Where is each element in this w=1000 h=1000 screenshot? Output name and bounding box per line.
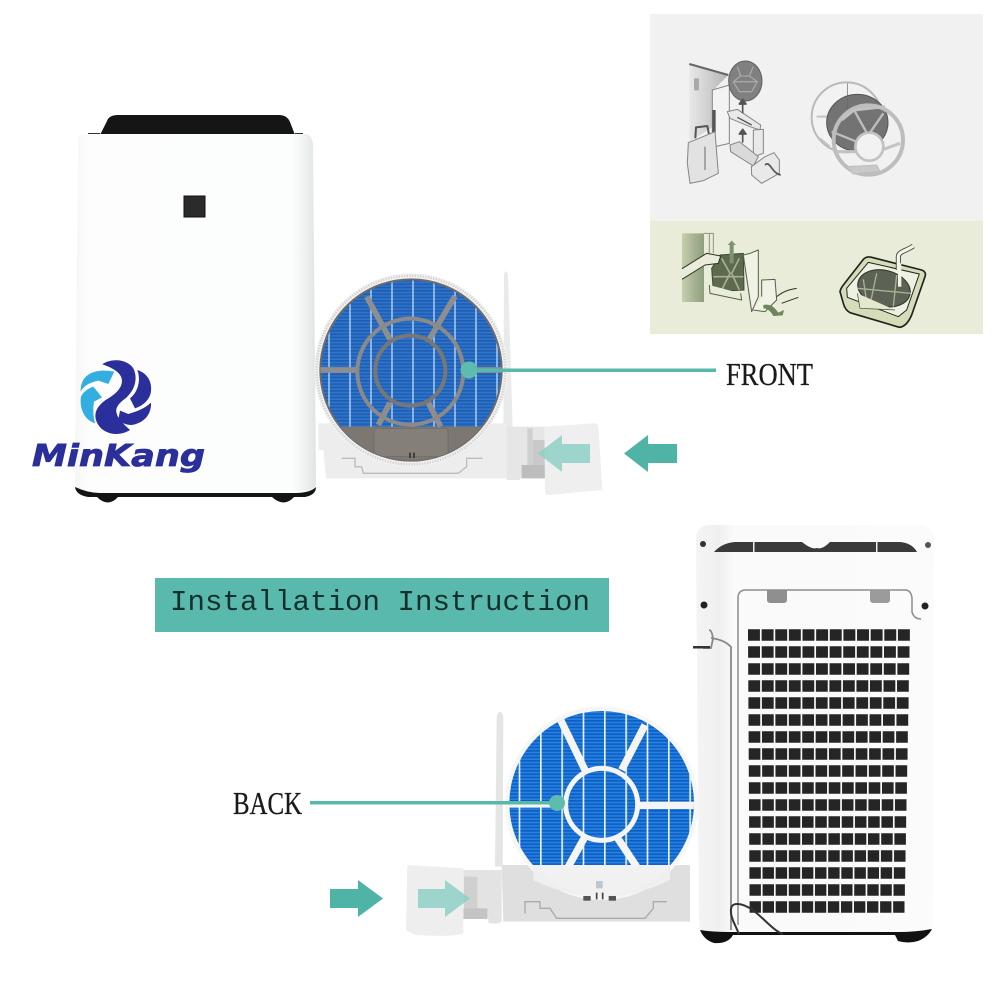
logo wordmark: MinKang [32,439,205,474]
solid arrow: back [330,880,383,917]
brand badge [184,196,205,217]
connector arm [463,870,502,924]
tower post [503,271,513,427]
label: FRONT: FRONT [726,356,813,392]
illustration: soaking filter in water [840,246,925,327]
unit body [696,525,934,934]
front view purifier unit [75,115,316,502]
blue filter media [320,279,502,461]
filter rim [505,707,698,900]
connector arm [507,427,545,480]
rear view purifier unit [693,525,934,943]
filter base [502,865,690,922]
unit body [75,134,316,491]
logo mark [81,360,151,434]
illustration: pulling filter out [682,233,798,316]
bottom edge and feet [700,929,932,943]
rear panel outline [738,590,921,925]
front filter assembly [314,271,602,495]
logo: MinKang [32,360,205,474]
back filter assembly [406,707,698,936]
blue filter media [509,711,694,865]
callout line: back [310,795,565,811]
power cord [731,904,783,934]
water tray clip [544,423,602,495]
panel: care illustrations [650,14,983,334]
top vent strip [714,542,917,552]
base and feet [75,487,316,502]
grey frame [317,296,507,467]
black lid [100,115,295,135]
tower post [495,712,503,867]
solid arrow: front [624,435,677,472]
label: BACK: BACK [233,785,302,821]
filter base [318,423,507,478]
air intake grid [748,635,910,907]
translucent arrow: front [538,435,590,472]
filter rim [314,273,508,467]
illustration: removing filter from unit [687,61,781,183]
panel background: grey [650,14,983,221]
top screws [700,541,706,547]
water tray clip [406,865,463,936]
panel tabs [767,590,787,603]
rear label marks [583,881,616,901]
translucent arrow: back [418,880,470,917]
panel background: green [650,221,983,334]
callout line: front [460,362,716,378]
illustration: filter exploded view [812,82,903,175]
banner: Installation Instruction: Installation Instruction [170,586,590,619]
banner: Installation Instruction [155,578,609,632]
side seam and latch [703,630,731,930]
